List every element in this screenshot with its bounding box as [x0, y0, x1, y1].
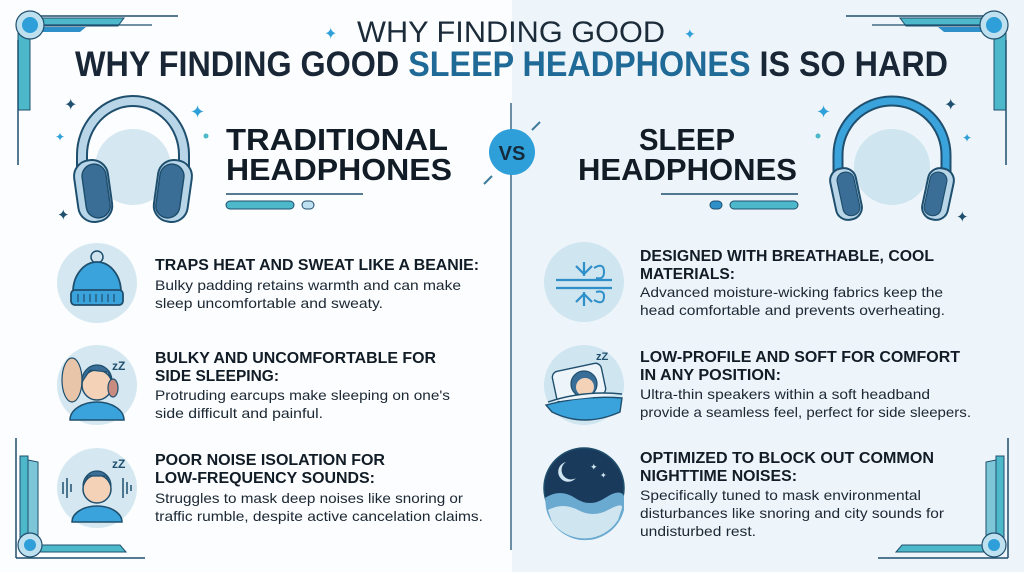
title: ✦ [324, 26, 337, 43]
text: low-profile: provide a seamless feel, perfect for side sleepers. [640, 404, 971, 420]
heading: traditional headphones: HEADPHONES [226, 152, 452, 187]
icon: traditional headphones: ✦ [57, 207, 70, 224]
icon: sleeping woman [544, 345, 624, 425]
icon: sleep headphones [816, 97, 972, 226]
heading: sleep headphones: SLEEP [639, 122, 735, 157]
icon: traditional headphones: ✦ [64, 97, 77, 114]
divider [510, 103, 512, 550]
text: bulky: BULKY AND UNCOMFORTABLE FOR [155, 350, 436, 367]
text: breathable [640, 248, 945, 318]
text: traps heat: Bulky padding retains warmth and can make [155, 277, 461, 293]
text: low-profile: Ultra-thin speakers within a soft headband [640, 386, 930, 402]
heading: sleep headphones: HEADPHONES [578, 152, 797, 187]
text: nighttime noises [640, 450, 944, 539]
text: traps heat: TRAPS HEAT AND SWEAT LIKE A BEANIE: [155, 257, 479, 274]
text: low-profile [640, 349, 971, 420]
icon: side sleeper [57, 345, 137, 425]
icon: cool materials [544, 242, 624, 322]
icon: sleeping woman: zZ [596, 351, 608, 363]
text: traps heat: sleep uncomfortable and sweaty. [155, 295, 383, 311]
text: nighttime noises: OPTIMIZED TO BLOCK OUT COMMON [640, 450, 934, 467]
vs badge: VS [499, 143, 525, 165]
text: bulky [155, 350, 450, 421]
title [75, 16, 948, 84]
corner decoration: bottom-right [878, 438, 1008, 558]
text: nighttime noises: undisturbed rest. [640, 523, 756, 539]
heading: sleep headphones [578, 122, 798, 209]
icon: traditional headphones [55, 97, 208, 224]
icon: noise [57, 448, 137, 528]
title: ✦ [684, 26, 696, 42]
icon: side sleeper: zZ [112, 359, 125, 373]
icon: night sky waves: ✦ [600, 471, 607, 480]
icon: traditional headphones: ✦ [55, 130, 65, 144]
icon: sleep headphones: ✦ [944, 97, 957, 114]
corner decoration: bottom-left [16, 438, 145, 558]
icon: beanie [57, 243, 137, 323]
text: nighttime noises: NIGHTTIME NOISES: [640, 468, 797, 485]
corner decoration: top-left [16, 11, 178, 165]
text: nighttime noises: Specifically tuned to mask environmental [640, 487, 921, 503]
text: noise: traffic rumble, despite active cancelation claims. [155, 508, 483, 524]
vs badge [484, 122, 540, 184]
text: nighttime noises: disturbances like snoring and city sounds for [640, 505, 944, 521]
text: noise: Struggles to mask deep noises like snoring or [155, 490, 463, 506]
text: noise: LOW-FREQUENCY SOUNDS: [155, 470, 375, 487]
icon: traditional headphones: ✦ [190, 102, 205, 122]
icon: night sky waves [544, 448, 624, 540]
icon: noise: zZ [112, 457, 125, 471]
title: WHY FINDING GOOD SLEEP HEADPHONES IS SO HARD [75, 45, 948, 84]
title: WHY FINDING GOOD [357, 16, 665, 49]
text: bulky: Protruding earcups make sleeping on one's [155, 387, 450, 403]
icon: night sky waves: ✦ [590, 462, 598, 472]
text: low-profile: IN ANY POSITION: [640, 367, 781, 384]
corner decoration: top-right [846, 11, 1008, 165]
text: breathable: MATERIALS: [640, 266, 735, 283]
text: bulky: side difficult and painful. [155, 405, 323, 421]
text: traps heat [155, 257, 479, 311]
text: noise [155, 452, 483, 524]
icon: sleep headphones: ✦ [962, 131, 972, 145]
icon: sleep headphones: ✦ [956, 209, 969, 226]
text: bulky: SIDE SLEEPING: [155, 368, 279, 385]
text: breathable: head comfortable and prevents overheating. [640, 302, 945, 318]
heading: traditional headphones [226, 122, 452, 209]
icon: sleep headphones: ✦ [816, 102, 831, 122]
heading: traditional headphones: TRADITIONAL [226, 122, 448, 157]
right background panel [512, 0, 1024, 572]
text: noise: POOR NOISE ISOLATION FOR [155, 452, 385, 469]
text: breathable: Advanced moisture-wicking fabrics keep the [640, 284, 943, 300]
text: breathable: DESIGNED WITH BREATHABLE, COOL [640, 248, 934, 265]
text: low-profile: LOW-PROFILE AND SOFT FOR COMFORT [640, 349, 961, 366]
